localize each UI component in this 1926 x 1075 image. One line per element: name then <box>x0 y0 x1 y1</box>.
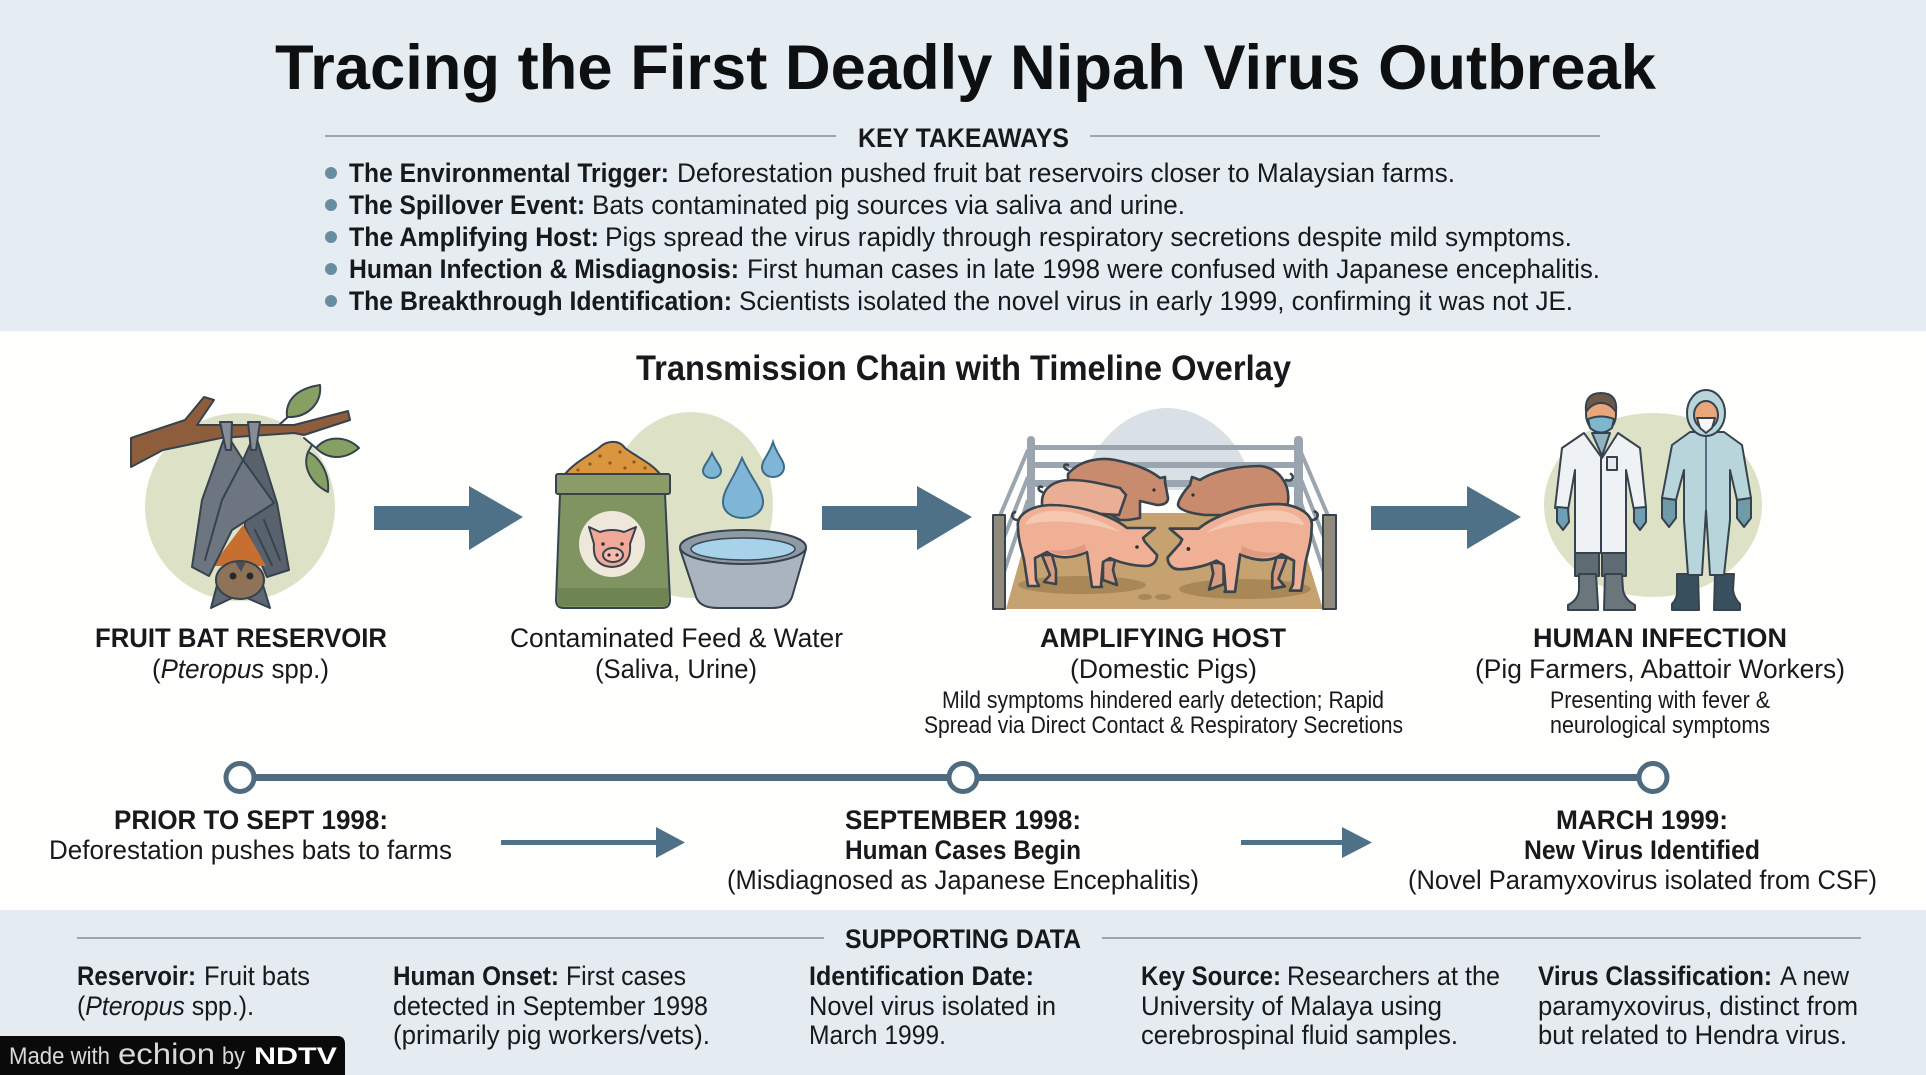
badge: made with echion by NDTV: echion <box>118 1038 215 1071</box>
bullet: human infection and misdiagnosis <box>325 254 1600 284</box>
label: contaminated feed and water <box>510 623 843 684</box>
timeline entry: march 1999: (Novel Paramyxovirus isolated from CSF) <box>1408 865 1877 895</box>
data: virus classification: A new <box>1780 961 1849 991</box>
data: human onset <box>393 961 710 1050</box>
bullet: amplifying host: The Amplifying Host: <box>349 222 599 252</box>
pig: front right <box>1168 504 1318 592</box>
bullet: environmental trigger <box>325 158 1455 188</box>
pig: front left <box>1012 505 1157 587</box>
bullet: spillover event <box>325 190 1185 220</box>
arrow: timeline second <box>1241 827 1372 858</box>
data: virus classification <box>1538 961 1858 1050</box>
timeline entry: march 1999: MARCH 1999: <box>1556 805 1728 835</box>
data: key source: cerebrospinal fluid samples. <box>1141 1020 1458 1050</box>
data: virus classification: but related to Hendra virus. <box>1538 1020 1847 1050</box>
heading: key takeaways: KEY TAKEAWAYS <box>858 123 1069 153</box>
pig: back left dark <box>1039 459 1168 520</box>
bullet: human infection and misdiagnosis: First human cases in late 1998 were confused with Japanese encephalitis. <box>747 254 1600 284</box>
data: key source: University of Malaya using <box>1141 991 1442 1021</box>
data: key source <box>1141 961 1500 1050</box>
bullet: spillover event: The Spillover Event: <box>349 190 585 220</box>
badge: made with echion by NDTV <box>0 1036 345 1075</box>
label: human infection: neurological symptoms <box>1550 712 1770 739</box>
label: amplifying host <box>924 623 1403 739</box>
bullet: amplifying host: Pigs spread the virus rapidly through respiratory secretions despite mild symptoms. <box>605 222 1572 252</box>
label: human infection <box>1475 623 1845 739</box>
label: amplifying host: AMPLIFYING HOST <box>1040 623 1286 653</box>
data: human onset: First cases <box>566 961 686 991</box>
heading: transmission chain: Transmission Chain with Timeline Overlay <box>636 349 1291 388</box>
panel: header and key takeaways <box>0 0 1926 331</box>
data: reservoir <box>77 961 310 1021</box>
arrow: feed to pigs <box>822 486 972 550</box>
timeline axis <box>226 764 1667 792</box>
data: identification date: March 1999. <box>809 1020 946 1050</box>
data: key source: Researchers at the <box>1287 961 1500 991</box>
data: key source: Key Source: <box>1141 961 1281 991</box>
panel: supporting data <box>0 910 1926 1075</box>
label: fruit bat reservoir <box>95 623 387 684</box>
timeline entry: prior to september 1998: Deforestation pushes bats to farms <box>49 835 452 865</box>
timeline entry: prior to september 1998: PRIOR TO SEPT 1998: <box>114 805 388 835</box>
data: reservoir: Reservoir: <box>77 961 196 991</box>
arrow: bat to feed <box>374 486 523 550</box>
data: identification date <box>809 961 1056 1050</box>
data: reservoir: (Pteropus spp.). <box>77 991 254 1021</box>
data: identification date: Novel virus isolated in <box>809 991 1056 1021</box>
data: reservoir: Fruit bats <box>204 961 310 991</box>
bullet: environmental trigger: The Environmental Trigger: <box>349 158 669 188</box>
bullet: human infection and misdiagnosis: Human Infection & Misdiagnosis: <box>349 254 739 284</box>
bullet: spillover event: Bats contaminated pig sources via saliva and urine. <box>592 190 1185 220</box>
timeline entry: september 1998: Human Cases Begin <box>845 835 1081 865</box>
label: amplifying host: Spread via Direct Contact & Respiratory Secretions <box>924 712 1403 739</box>
icon: contaminated feed bag and water bowl <box>556 412 806 608</box>
arrow: timeline first <box>501 827 685 858</box>
label: fruit bat reservoir: (Pteropus spp.) <box>152 654 329 684</box>
timeline entry: september 1998: (Misdiagnosed as Japanese Encephalitis) <box>727 865 1199 895</box>
data: human onset: (primarily pig workers/vets). <box>393 1020 710 1050</box>
title: Tracing the First Deadly Nipah Virus Outbreak <box>275 33 1657 103</box>
data: virus classification: Virus Classification: <box>1538 961 1772 991</box>
data: human onset: detected in September 1998 <box>393 991 708 1021</box>
bullet: breakthrough identification <box>325 286 1573 316</box>
label: contaminated feed and water: (Saliva, Urine) <box>595 654 757 684</box>
data: human onset: Human Onset: <box>393 961 559 991</box>
badge: made with echion by NDTV: Made with <box>9 1043 110 1070</box>
bullet: breakthrough identification: Scientists isolated the novel virus in early 1999, confirming it was not JE. <box>739 286 1573 316</box>
label: amplifying host: Mild symptoms hindered early detection; Rapid <box>942 687 1384 714</box>
icon: farmer in lab coat and worker in protective suit <box>1544 390 1762 610</box>
icon: fruit bat hanging from branch <box>131 385 359 608</box>
data: virus classification: paramyxovirus, distinct from <box>1538 991 1858 1021</box>
timeline entry: prior to september 1998 <box>49 805 452 865</box>
bullet: breakthrough identification: The Breakthrough Identification: <box>349 286 732 316</box>
pig: back right dark <box>1178 466 1293 515</box>
timeline entry: march 1999 <box>1408 805 1877 895</box>
label: fruit bat reservoir: FRUIT BAT RESERVOIR <box>95 623 387 653</box>
data: identification date: Identification Date: <box>809 961 1034 991</box>
badge: made with echion by NDTV: NDTV <box>254 1043 337 1070</box>
label: human infection: Presenting with fever & <box>1550 687 1770 714</box>
label: human infection: HUMAN INFECTION <box>1533 623 1787 653</box>
timeline entry: september 1998 <box>727 805 1199 895</box>
timeline entry: september 1998: SEPTEMBER 1998: <box>845 805 1081 835</box>
label: contaminated feed and water: Contaminated Feed & Water <box>510 623 843 653</box>
arrow: pigs to humans <box>1371 486 1521 549</box>
badge: made with echion by NDTV: by <box>222 1043 245 1070</box>
timeline entry: march 1999: New Virus Identified <box>1524 835 1760 865</box>
label: amplifying host: (Domestic Pigs) <box>1070 654 1257 684</box>
bullet: environmental trigger: Deforestation pushed fruit bat reservoirs closer to Malaysian farms. <box>677 158 1455 188</box>
label: human infection: (Pig Farmers, Abattoir Workers) <box>1475 654 1845 684</box>
icon: pigs in a pen <box>993 408 1336 609</box>
heading: supporting data: SUPPORTING DATA <box>845 924 1081 954</box>
